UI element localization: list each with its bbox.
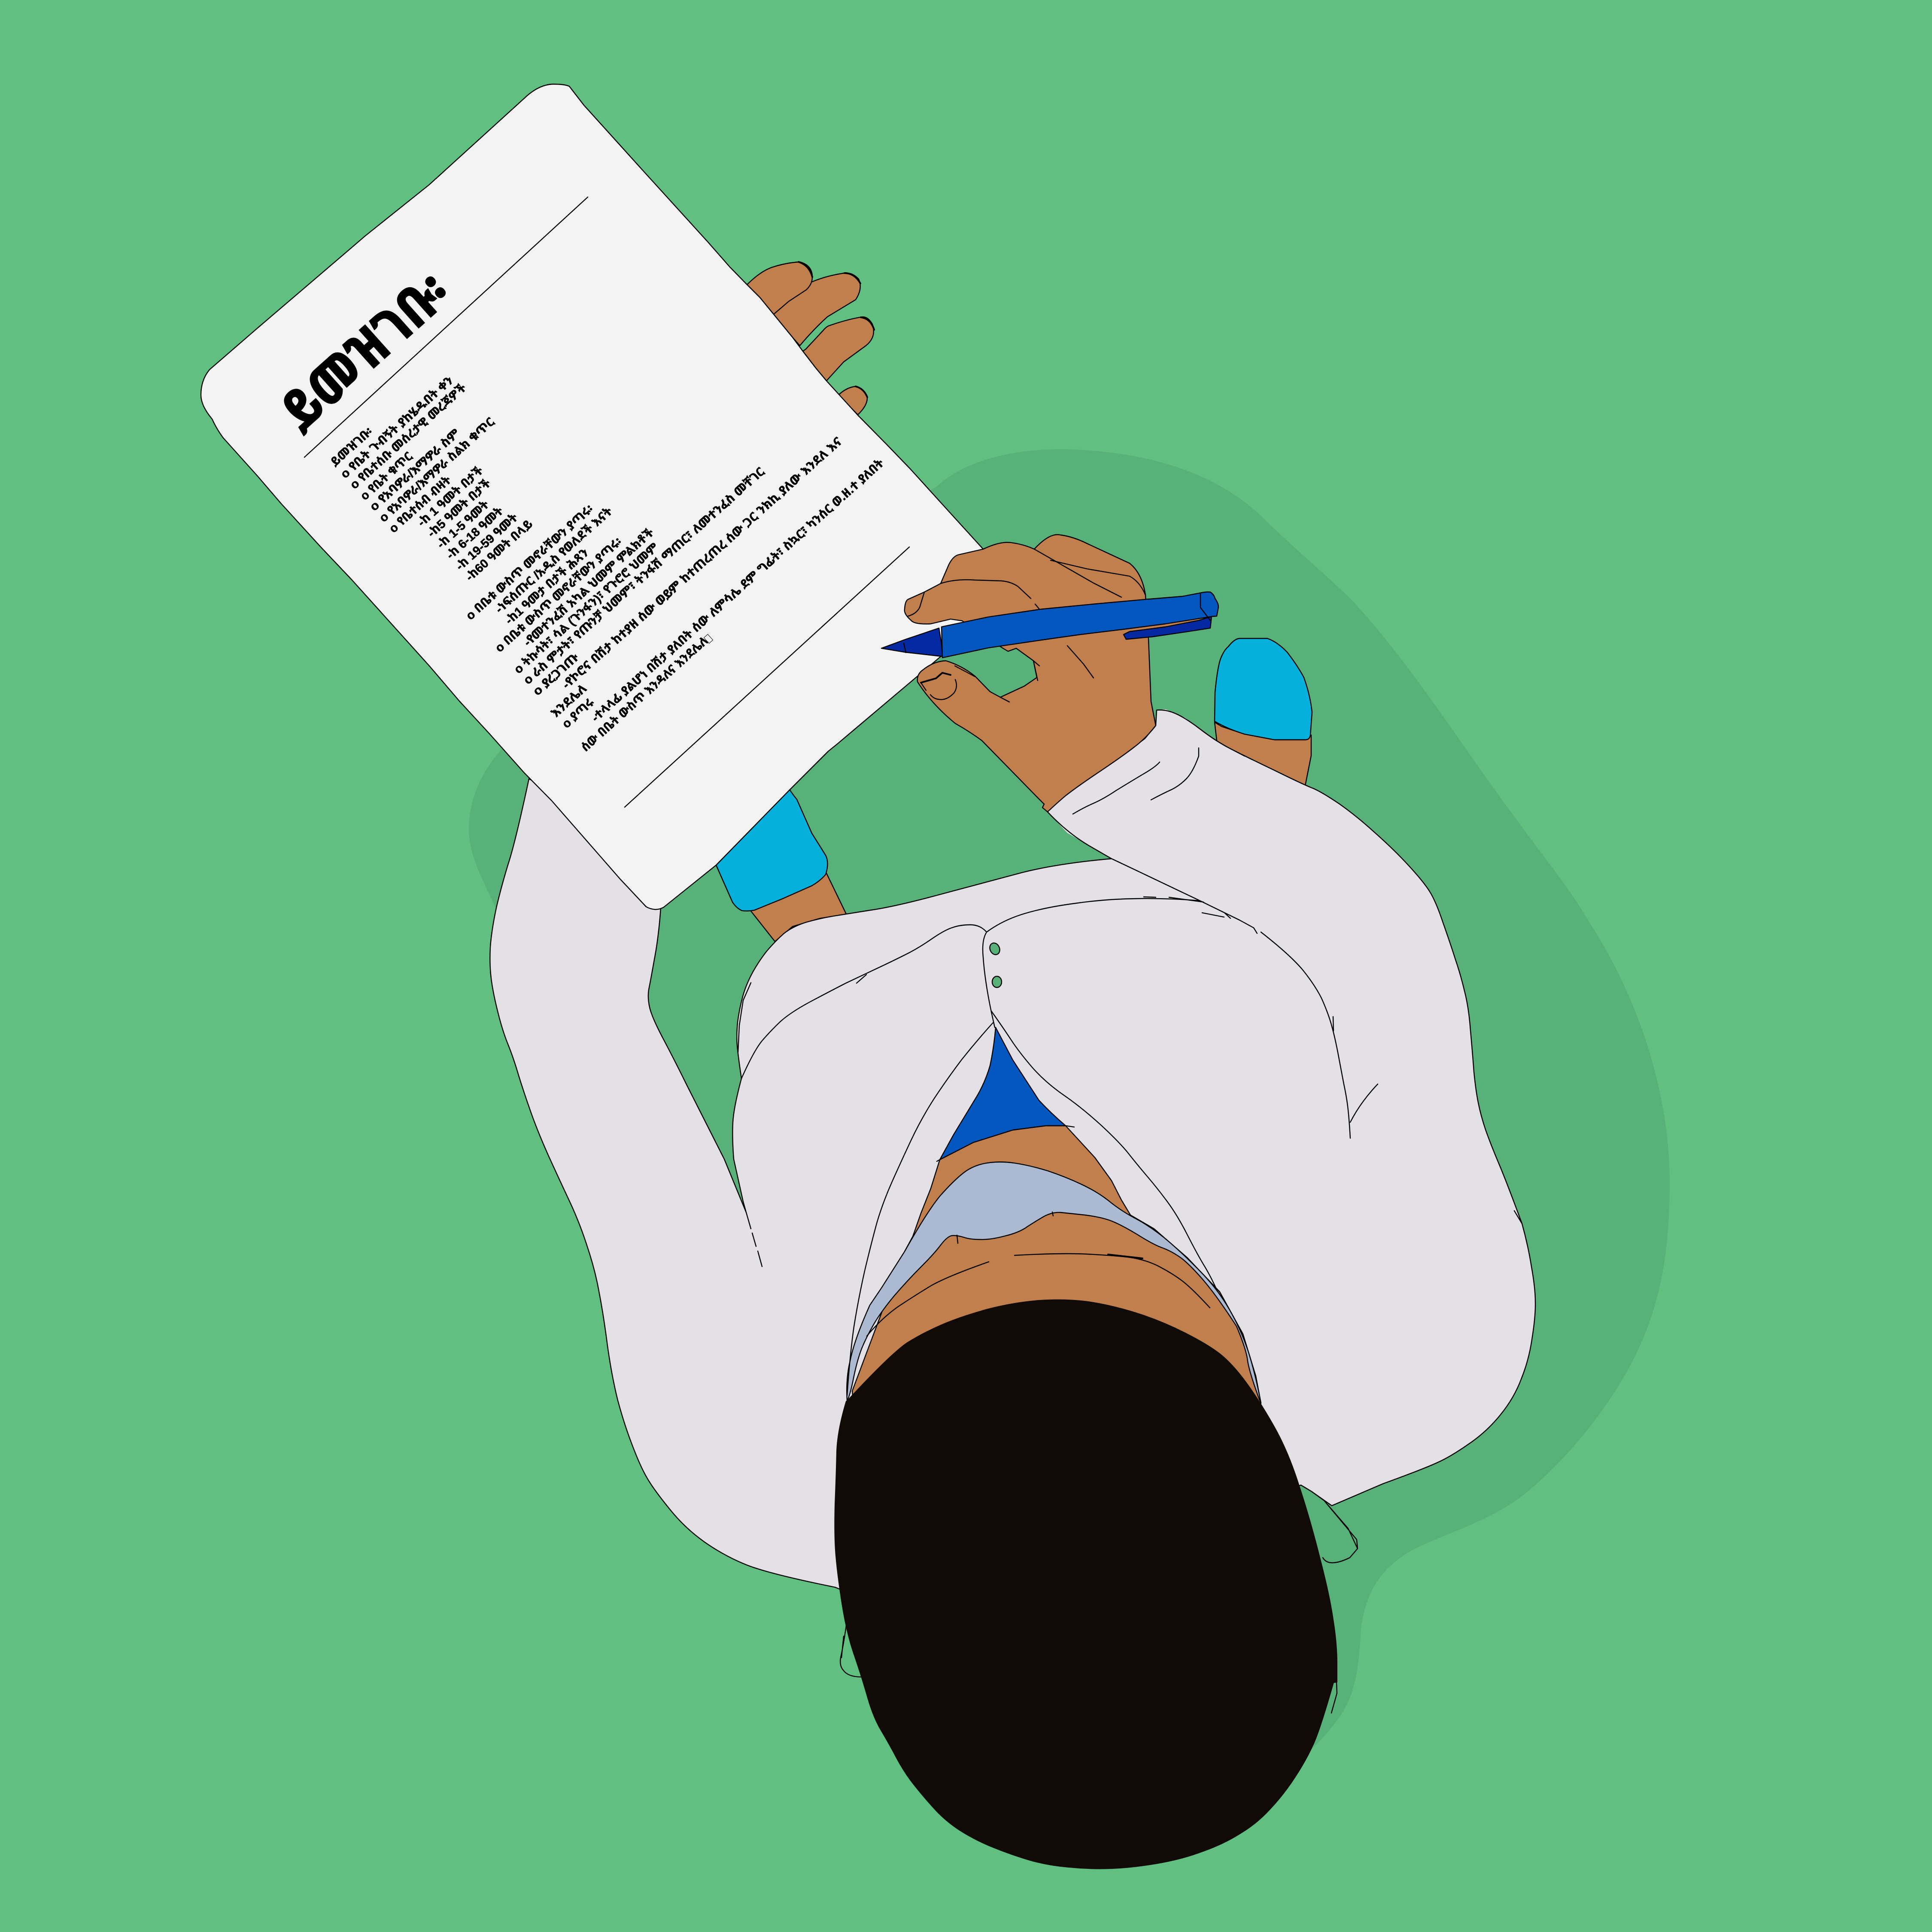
shirt buttons — [988, 942, 1002, 987]
form body text: o የቤተሰቡ መሰረታዊ መረጃዎች — [347, 381, 469, 492]
right cuff — [1215, 638, 1312, 740]
left cuff — [716, 790, 828, 911]
neck creases — [867, 1126, 1210, 1336]
thumb nail edge — [921, 673, 951, 683]
sleeve cuff outline — [1048, 710, 1245, 859]
form body text: o የቤት ጉብኝት ያከሄዱበት ቀን — [338, 374, 456, 481]
form body text: -ከ 19-59 ዓመት — [453, 511, 520, 573]
rule below title — [304, 197, 588, 457]
soft drop shadow — [469, 449, 1670, 1752]
missing glyph box at end of text — [704, 634, 713, 644]
form title: ይመዝገቡ፡ — [269, 262, 460, 441]
form body text: o ራስ ምታት፣ የጡንቻ ህመም፣ ትንፋሽ ማጠር፣ ለመተንፈስ መቸገር — [521, 465, 767, 687]
pen clip — [1124, 617, 1212, 639]
skin between pen and clip — [1129, 614, 1202, 635]
pen body — [942, 592, 1218, 658]
form body text: -ከ 1 ዓመት በታች — [415, 464, 486, 529]
form body text: -ከ60 ዓመት በላይ — [463, 517, 535, 583]
blue undershirt — [940, 1027, 1066, 1160]
form body text: እንደሌለ — [548, 681, 589, 720]
ear right — [1301, 1485, 1358, 1563]
sleeve cuff fill over the wrist — [1048, 709, 1245, 859]
form body text: -የኮሮና በሽታ ከተያዘ ሰው ወይም ከተጠረጠረ ሰው ጋር ንክኪ ያለው እንደለ እና — [559, 434, 844, 691]
form body text: o በቤቱ ውስጥ መኖራቸውን ያጣሩ፡ — [463, 502, 596, 623]
hand creases — [908, 549, 1145, 702]
form body text: -የመተንፈሽ አካል ህመም ምልክቶች — [521, 526, 656, 649]
writing hand — [905, 535, 1156, 812]
form body text — [328, 374, 886, 754]
paper form — [201, 84, 992, 909]
form body text: ሰው በቤት ውስጥ እንዳለና እንደሌለ — [578, 634, 711, 754]
finger 2 — [774, 273, 860, 346]
form body text: o ያጣሩ — [559, 696, 597, 731]
thick finger tip strokes — [799, 262, 874, 397]
ear tip line — [1331, 1682, 1337, 1713]
thumb nail — [921, 680, 957, 699]
form body text: -ከ5 ዓመት በታች — [425, 477, 493, 540]
form body text: -ከ1 ዓመታ በታች ሕጻን — [502, 546, 591, 627]
form body text: o በቤቱ ውስጥ መኖራቸውን ያጣሩ፡ — [492, 535, 624, 655]
right forearm behind sleeve — [1215, 722, 1311, 790]
sleeve fold lines — [1073, 748, 1199, 814]
left wrist — [749, 873, 846, 942]
pen — [881, 592, 1218, 658]
form body text: -ተላላፊ ያልሆነ በሽታ ያለበት ሰው ለምሳሌ ደም ግፊት፣ ስኳር፣ ካንሰር ወ.ዘ.ተ ያለበት — [589, 456, 886, 724]
form body text: -ከ 6-18 ዓመት — [444, 504, 506, 562]
ear left — [840, 1625, 862, 1677]
light blue collar — [847, 1162, 1261, 1403]
button 1 — [988, 942, 1002, 956]
rule at bottom of form — [625, 547, 909, 807]
pen tip — [881, 628, 942, 656]
pen details — [904, 593, 1210, 653]
form body text: o የቤት ቁጥር — [358, 450, 415, 503]
form body text: o ትኩሳት፣ ሳል (ጉንፋን)፣ የጉሮሮ ህመም — [511, 540, 661, 676]
form body text: -ነፍሰጡር /አዲስ የወለደች እናት — [492, 504, 615, 616]
finger 4 — [838, 386, 867, 415]
form body text: o የአባዎራ/እማዎራ ስልክ ቁጥር — [377, 415, 497, 525]
shirt seams and folds — [738, 859, 1522, 1395]
holding hand: fingers behind the paper — [747, 262, 874, 415]
finger 1 — [747, 262, 812, 314]
form body text: o የቤተሰብ ብዛት — [386, 473, 453, 535]
white shirt body and sleeves — [490, 710, 1535, 1631]
hand shape — [905, 535, 1156, 812]
form body text: o የአባዎራ/እማዎራ ስም — [367, 426, 462, 513]
form body text: o ያረጋገጡ — [530, 650, 581, 698]
form body text: ይመዝገቡ፡ — [328, 425, 375, 469]
button 2 — [992, 976, 1002, 987]
form body text: -ከ 1-5 ዓመት — [434, 498, 492, 551]
black hair — [835, 1300, 1337, 1869]
finger 3 — [803, 317, 874, 381]
neck skin — [852, 1126, 1261, 1460]
